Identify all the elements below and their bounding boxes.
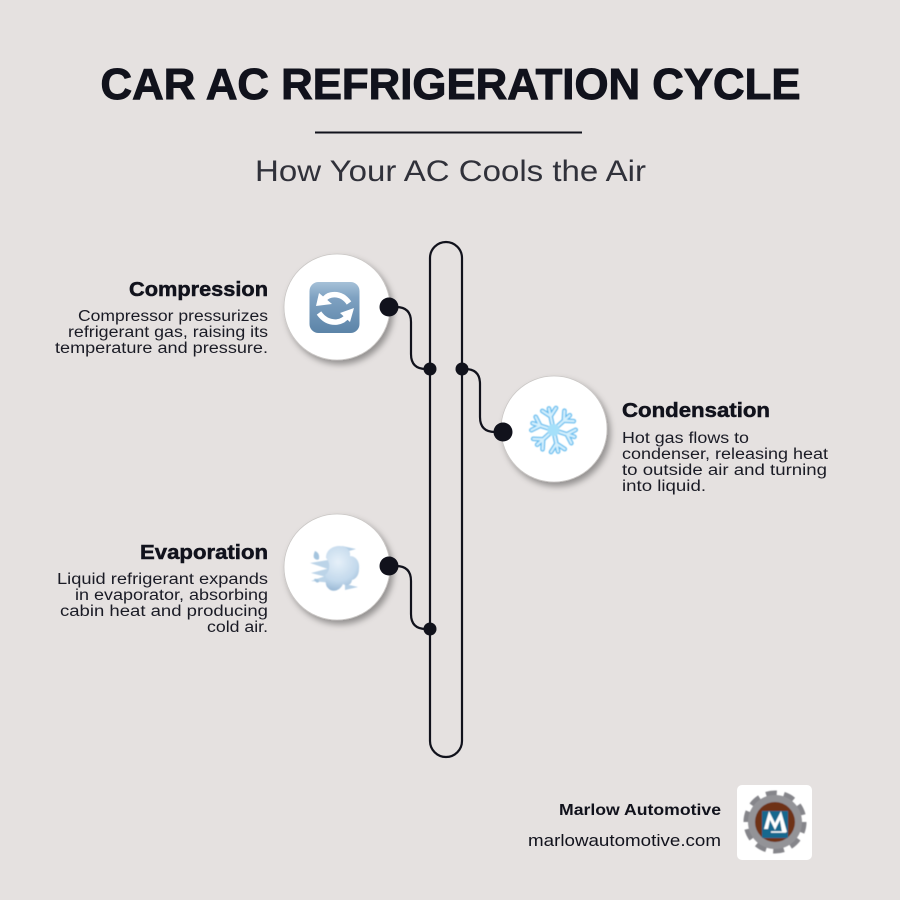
condensation text: into liquid. — [622, 478, 706, 495]
condensation dot — [494, 422, 512, 442]
evaporation text: cold air. — [207, 619, 268, 636]
connector: compression to loop — [389, 307, 436, 376]
condensation text: condenser, releasing heat — [622, 446, 829, 463]
compression text: Compressor pressurizes — [78, 308, 268, 325]
condensation text: to outside air and turning — [622, 462, 827, 479]
evaporation text: cabin heat and producing — [60, 603, 268, 620]
evaporation circle — [284, 514, 390, 620]
step: evaporation — [57, 514, 398, 636]
step: compression — [55, 254, 398, 360]
compression text: temperature and pressure. — [55, 340, 268, 357]
central cycle loop — [430, 242, 462, 757]
subtitle: How Your AC Cools the Air — [255, 155, 646, 188]
evaporation text: Evaporation — [140, 542, 268, 564]
compression dot — [380, 298, 398, 316]
icon: wind puff — [310, 546, 359, 591]
logo — [737, 785, 812, 860]
condensation text: Hot gas flows to — [622, 430, 749, 447]
condensation text: Condensation — [622, 400, 770, 422]
compression text: refrigerant gas, raising its — [68, 324, 268, 341]
evaporation text — [57, 542, 268, 636]
compression text — [55, 279, 268, 357]
icon: snowflake — [527, 404, 580, 456]
footer brand name: Marlow Automotive — [559, 802, 721, 819]
title: CAR AC REFRIGERATION CYCLE — [100, 60, 800, 109]
connector: evaporation to loop — [389, 566, 436, 636]
connector: loop to condensation — [456, 362, 503, 432]
evaporation dot — [380, 556, 398, 576]
evaporation text: in evaporator, absorbing — [75, 587, 268, 604]
condensation text — [622, 400, 829, 495]
condensation circle — [501, 376, 607, 482]
step: condensation — [494, 376, 829, 495]
footer website: marlowautomotive.com — [528, 832, 721, 850]
evaporation text: Liquid refrigerant expands — [57, 571, 268, 588]
icon: cycle arrows — [310, 282, 360, 333]
compression text: Compression — [129, 279, 268, 301]
compression circle — [284, 254, 390, 360]
